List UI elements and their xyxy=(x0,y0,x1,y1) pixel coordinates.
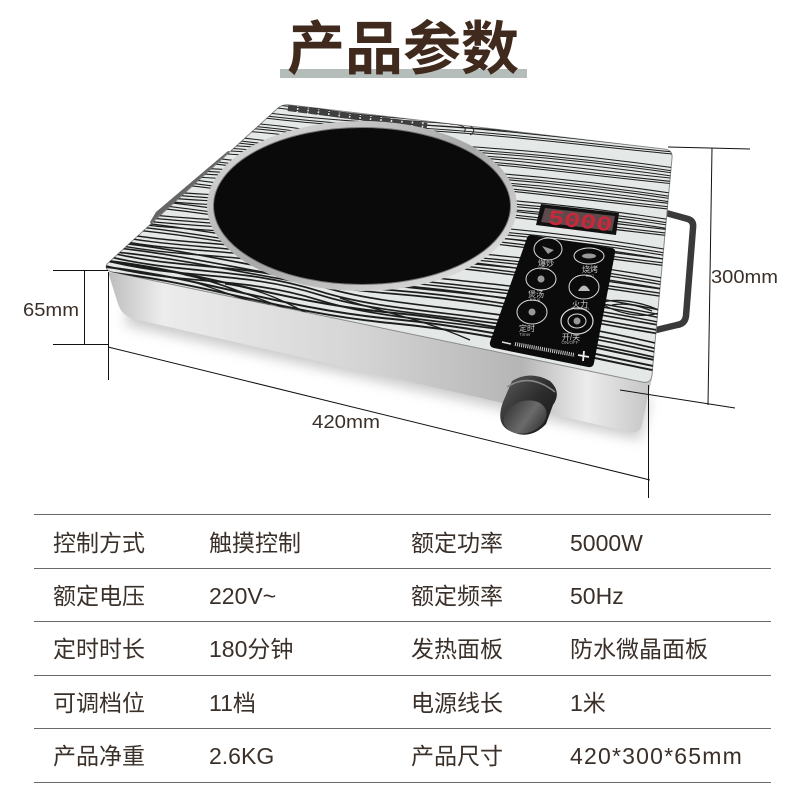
title: 产品参数 xyxy=(287,17,519,82)
row: control method and rated power xyxy=(53,530,643,556)
row: rated voltage and frequency: 额定电压 xyxy=(53,583,145,609)
handle xyxy=(652,213,693,331)
product illustration with dimension lines xyxy=(23,104,778,498)
row: net weight and size xyxy=(53,743,743,769)
row: timer and heating panel: 定时时长 xyxy=(53,636,145,662)
control: soup xyxy=(526,268,556,302)
row: timer and heating panel: 发热面板 xyxy=(411,636,503,662)
row: rated voltage and frequency: 220V~ xyxy=(209,583,276,609)
control: timer xyxy=(517,300,547,337)
row: control method and rated power: 触摸控制 xyxy=(209,530,301,556)
row: rated voltage and frequency: 50Hz xyxy=(570,583,624,609)
row: power levels and cord length: 1米 xyxy=(570,690,606,716)
brand mark xyxy=(288,108,427,126)
stainless side body xyxy=(108,272,652,432)
control: power level xyxy=(569,275,599,311)
digital display: 5000 xyxy=(546,207,614,238)
row: rated voltage and frequency: 额定频率 xyxy=(411,583,503,609)
row: timer and heating panel: 180分钟 xyxy=(209,636,293,662)
control: bbq: BBQ xyxy=(586,273,594,278)
dimension: 300mm xyxy=(620,147,778,408)
row: rated voltage and frequency xyxy=(53,583,624,609)
control: timer: Timer xyxy=(519,332,531,337)
specification table xyxy=(34,514,771,783)
row: timer and heating panel xyxy=(53,636,708,662)
control: on off: ON/OFF xyxy=(562,340,579,345)
dimension: 420mm: 420mm xyxy=(312,412,380,432)
row: power levels and cord length xyxy=(53,690,606,716)
temperature knob xyxy=(499,376,557,439)
row: control method and rated power: 5000W xyxy=(570,530,643,556)
power slider xyxy=(502,342,589,361)
row: control method and rated power: 额定功率 xyxy=(411,530,503,556)
digital display xyxy=(536,204,619,238)
control: soup: 煲汤 xyxy=(528,289,544,299)
control: power level: Function xyxy=(571,306,589,311)
wood grain xyxy=(106,104,672,371)
dimension: 420mm xyxy=(108,272,650,498)
control: bbq xyxy=(574,248,604,278)
dimension: 300mm: 300mm xyxy=(711,267,778,287)
row: power levels and cord length: 电源线长 xyxy=(411,690,503,716)
induction hob circle xyxy=(207,121,517,291)
control: bbq: 烧烤 xyxy=(582,264,598,274)
cooker shadow xyxy=(125,300,650,440)
row: timer and heating panel: 防水微晶面板 xyxy=(570,636,708,662)
control: fried xyxy=(534,238,562,271)
control: power level: 火力 xyxy=(572,299,588,309)
dimension: 65mm: 65mm xyxy=(23,300,79,320)
control: on off xyxy=(561,308,593,345)
control: fried: 爆炒 xyxy=(538,258,554,268)
row: power levels and cord length: 可调档位 xyxy=(53,690,145,716)
row: net weight and size: 2.6KG xyxy=(209,743,274,769)
control panel xyxy=(490,235,615,367)
row: net weight and size: 420*300*65mm xyxy=(570,743,743,769)
row: power levels and cord length: 11档 xyxy=(209,690,256,716)
row: control method and rated power: 控制方式 xyxy=(53,530,145,556)
control: timer: 定时 xyxy=(519,323,535,333)
glass top plate xyxy=(100,86,680,382)
dimension: 65mm xyxy=(23,270,108,344)
row: net weight and size: 产品尺寸 xyxy=(411,743,503,769)
rear edge xyxy=(150,151,233,226)
control: soup: Soup xyxy=(530,297,541,302)
control: fried: Fried xyxy=(539,266,549,271)
row: net weight and size: 产品净重 xyxy=(53,743,145,769)
control: on off: 开/关 xyxy=(562,332,580,342)
